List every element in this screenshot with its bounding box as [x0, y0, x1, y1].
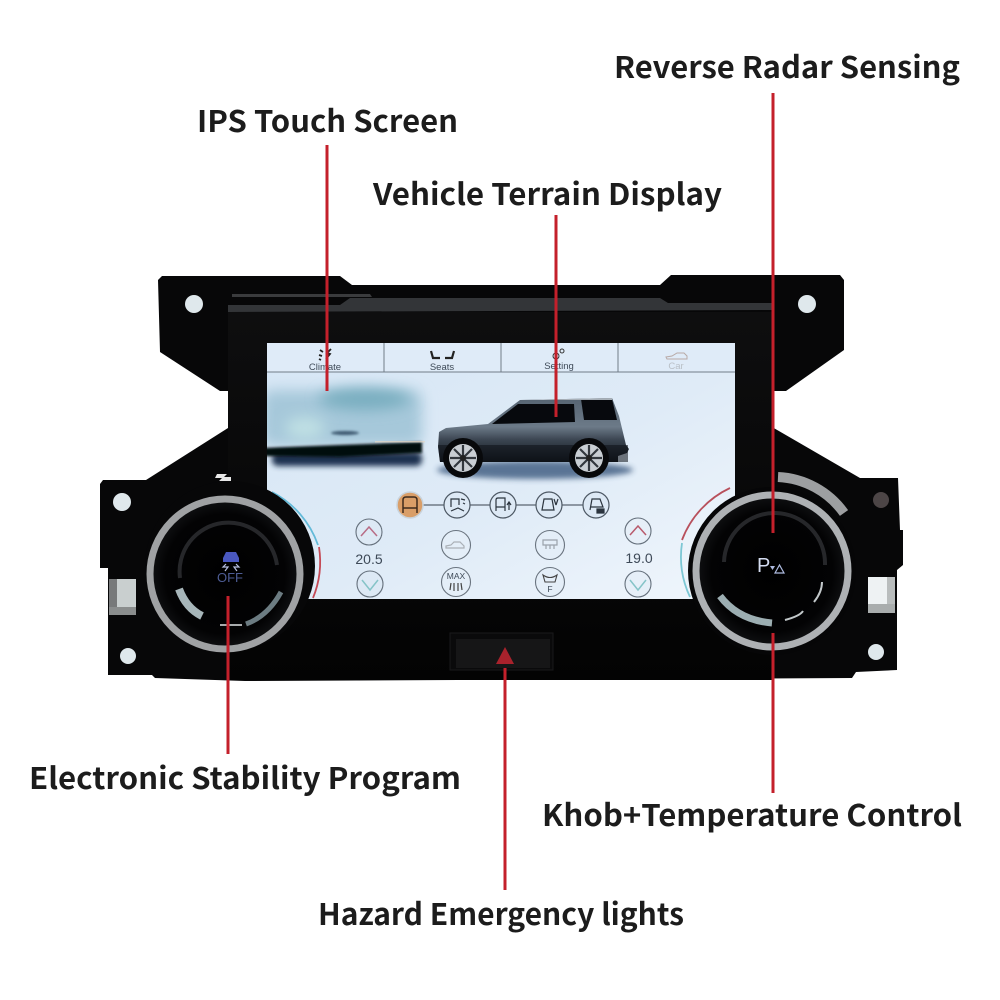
callout line: Electronic Stability Program [226, 596, 230, 754]
vehicle illustration [437, 398, 633, 479]
black mounting bracket [100, 275, 903, 681]
tab: Seats: Seats [430, 362, 454, 373]
left temperature control: 20.5 [355, 551, 383, 567]
function buttons [442, 530, 564, 596]
left temperature control [355, 519, 383, 597]
terrain backdrop [262, 388, 425, 466]
tab: Car [666, 353, 687, 372]
callout line: Knob and Temperature Control [772, 633, 774, 793]
label: Vehicle Terrain Display: Vehicle Terrain Display [372, 170, 722, 214]
upper housing ridge [228, 294, 772, 312]
parking icon [757, 555, 784, 577]
mounting holes [113, 295, 889, 664]
label: Hazard Emergency lights: Hazard Emergency lights [318, 890, 684, 934]
tab: Climate: Climate [309, 362, 341, 373]
label: Khob+Temperature Control: Khob+Temperature Control [542, 791, 962, 835]
screen housing [228, 312, 772, 680]
parking icon: P [757, 555, 770, 577]
stability icon [217, 552, 243, 585]
label: Electronic Stability Program: Electronic Stability Program [29, 754, 461, 798]
right temperature control: 19.0 [625, 550, 653, 566]
function buttons: F [547, 584, 553, 594]
tab bar [267, 343, 735, 373]
callout line: Reverse Radar Sensing [772, 93, 774, 533]
rear wheel [569, 438, 609, 478]
device: climate control panel [100, 275, 903, 681]
tab: Car: Car [668, 361, 684, 372]
tab: Setting: Setting [544, 361, 574, 372]
terrain mode selector [397, 492, 609, 518]
stability icon: OFF [217, 570, 243, 585]
label: Reverse Radar Sensing: Reverse Radar Sensing [614, 43, 960, 87]
hazard button [450, 633, 553, 670]
right temperature control [625, 518, 653, 597]
side slots [109, 577, 895, 615]
left knob [145, 474, 315, 651]
front wheel [443, 438, 483, 478]
right knob [688, 477, 856, 655]
touch screen [262, 343, 735, 599]
callout line: Hazard Emergency lights [504, 668, 506, 890]
tab: Setting [544, 349, 574, 372]
tab: Climate [309, 349, 341, 373]
callout line: Vehicle Terrain Display [554, 215, 558, 417]
tab: Seats [430, 351, 454, 373]
function buttons: MAX [447, 571, 466, 581]
label: IPS Touch Screen: IPS Touch Screen [197, 97, 458, 141]
temperature arcs [272, 488, 730, 598]
callout line: IPS Touch Screen [326, 145, 328, 391]
